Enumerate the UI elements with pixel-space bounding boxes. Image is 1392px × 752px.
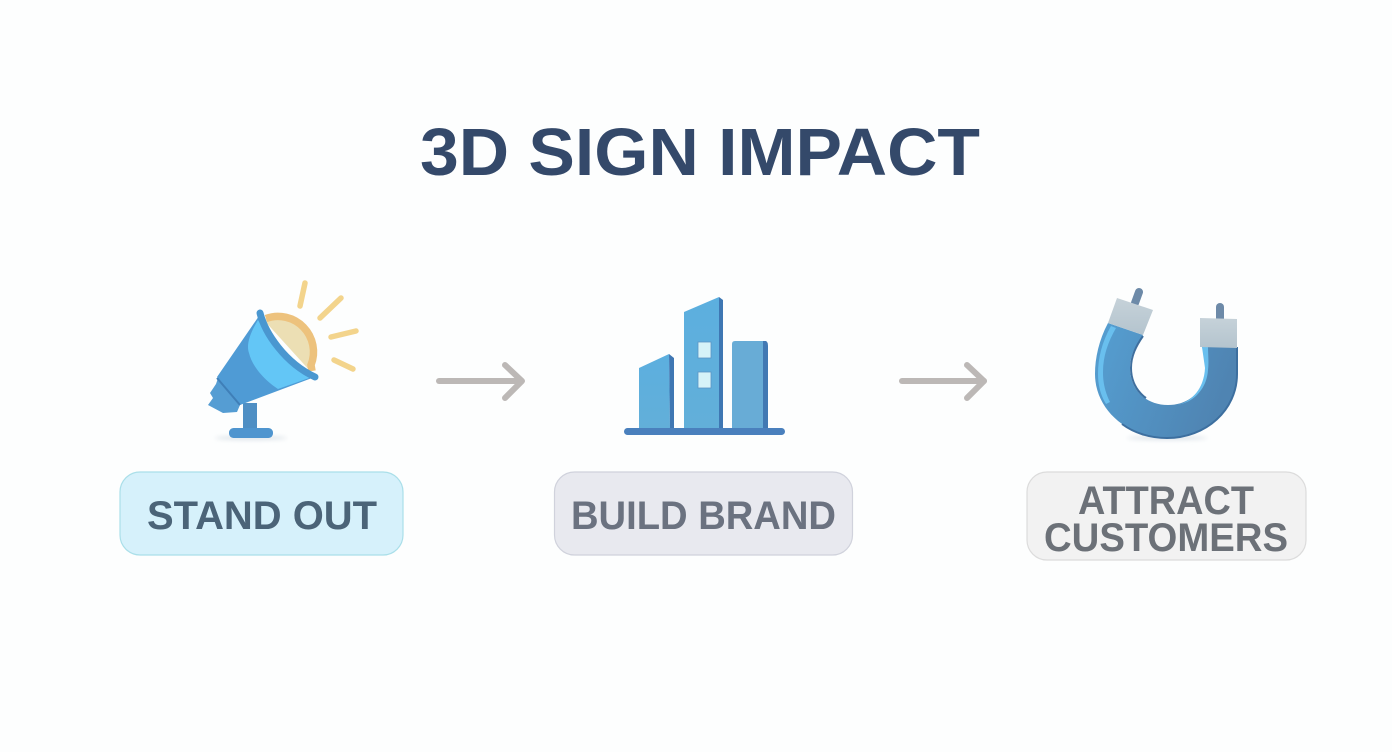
pill: stand out: STAND OUT [147,494,377,538]
megaphone stand [229,403,273,438]
pill: build brand: BUILD BRAND [571,494,836,538]
magnet right highlight [1176,347,1208,405]
megaphone back band [217,378,240,405]
right building [732,341,768,430]
magnet left highlight [1098,326,1116,404]
pill: attract customers: CUSTOMERS [1044,516,1288,560]
megaphone sun glow [262,316,314,372]
magnet shadow [1127,436,1207,440]
magnet body [1095,323,1237,438]
title: 3D SIGN IMPACT [420,115,980,190]
pill: stand out [120,472,403,555]
magnet caps [1108,298,1237,348]
pill: attract customers [1027,472,1306,560]
megaphone back cap [208,378,240,413]
arrow 1 [439,365,522,398]
magnet inner shade [1131,336,1146,398]
icon shadow [215,436,287,440]
icon: magnet [1095,292,1237,440]
pill: attract customers: ATTRACT [1078,479,1254,523]
magnet pins [1135,292,1220,320]
middle building [684,297,723,430]
megaphone body [217,316,312,405]
windows [698,342,711,388]
megaphone rim [260,313,315,377]
magnet outer edge [1122,347,1237,438]
icon: buildings [624,297,785,435]
ground line [624,428,785,435]
pill: build brand [554,472,852,555]
left building [639,354,674,430]
megaphone rays [300,283,356,369]
icon: megaphone [208,283,356,440]
megaphone highlight [248,320,312,389]
arrow 2 [902,365,984,398]
